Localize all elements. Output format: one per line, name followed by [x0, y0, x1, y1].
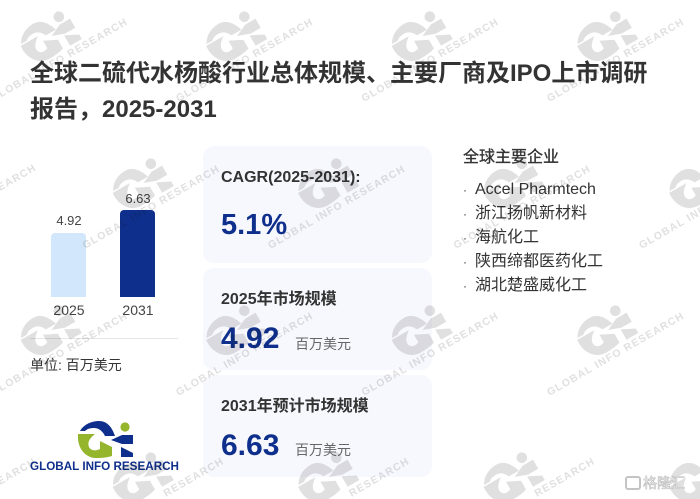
title: 报告，2025-2031	[30, 96, 217, 123]
bar 2025	[51, 233, 86, 297]
panel: 2025 market size	[203, 268, 432, 370]
watermark pattern: GLOBAL INFO RESEARCH	[266, 164, 408, 252]
CAGR value: 5.1%	[221, 209, 287, 241]
company 5: ·	[463, 279, 467, 293]
watermark pattern: RESEARCH	[162, 456, 226, 499]
company 5: 湖北楚盛威化工	[475, 277, 587, 294]
title	[30, 60, 647, 123]
companies heading: 全球主要企业	[463, 149, 559, 166]
watermark pattern: GLOBAL INFO RESEARCH	[174, 17, 316, 105]
2031 heading: 2031年预计市场规模	[221, 398, 369, 415]
watermark pattern: RESEARCH	[533, 456, 597, 499]
watermark pattern: GLOBAL INFO RESEARCH	[452, 164, 593, 252]
company 3: 海航化工	[475, 229, 539, 246]
watermark pattern: GLOBAL INFO RESEARCH	[360, 17, 501, 105]
title: 全球二硫代水杨酸行业总体规模、主要厂商及IPO上市调研	[30, 60, 647, 87]
2025 unit: 百万美元	[295, 336, 351, 352]
company 4: ·	[463, 255, 467, 269]
axis label 2025: 2025	[53, 302, 85, 318]
watermark pattern: GLOBAL INFO RESEARCH	[546, 311, 687, 399]
2025 heading: 2025年市场规模	[221, 291, 337, 308]
company 1: ·	[463, 183, 467, 197]
source watermark: 格隆汇: 格隆汇	[643, 473, 685, 493]
CAGR heading: CAGR(2025-2031):	[221, 169, 361, 186]
2025 value: 4.92	[221, 322, 279, 355]
watermark pattern: RESEARCH	[348, 456, 412, 499]
watermark pattern: GLOBAL INFO RESEARCH	[174, 311, 316, 399]
panel: 2031 forecast market size	[203, 375, 432, 477]
watermark pattern: GLOBAL INFO RESEARCH	[546, 17, 687, 105]
logo: Global Info Research	[30, 421, 179, 473]
chart unit note: 单位: 百万美元	[30, 357, 122, 373]
2031 unit: 百万美元	[295, 442, 351, 458]
company 3: ·	[463, 231, 467, 245]
company 2: 浙江扬帆新材料	[475, 205, 587, 222]
company list	[463, 181, 603, 294]
company 4: 陕西缔都医药化工	[475, 253, 603, 270]
company 1: Accel Pharmtech	[475, 181, 596, 198]
company 2: ·	[463, 207, 467, 221]
bar value 2031: 6.63	[125, 191, 151, 206]
watermark pattern: GLOBAL INFO RESEARCH	[360, 311, 501, 399]
2031 value: 6.63	[221, 429, 279, 462]
bar chart: market size 2025 vs 2031	[30, 188, 178, 339]
bar 2031	[120, 210, 155, 297]
logo: Global Info Research: GLOBAL INFO RESEARCH	[30, 459, 179, 473]
watermark pattern: GLOBAL INFO RESEARCH	[81, 164, 222, 252]
panel: CAGR	[203, 146, 432, 263]
axis label 2031: 2031	[122, 302, 154, 318]
bar value 2025: 4.92	[56, 213, 82, 228]
